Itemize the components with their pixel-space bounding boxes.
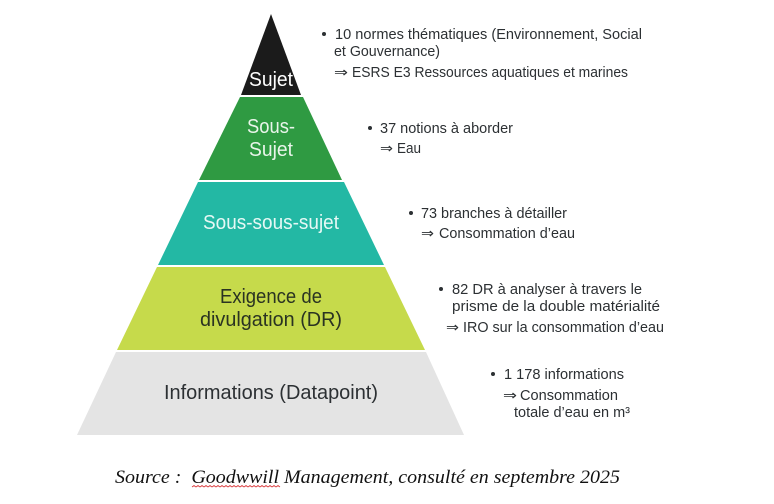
- text block: Sous-sous-sujet details: [409, 206, 575, 242]
- tier: Exigence de divulgation: divulgation (DR): [200, 309, 342, 331]
- text block: DR details: IRO sur la consommation d’eau: [463, 320, 664, 336]
- tier: Sous-Sujet: [199, 97, 342, 180]
- text block: Informations details: Consommation: [520, 388, 618, 404]
- tier: Informations: [77, 352, 464, 435]
- text block: Sujet details: [322, 27, 642, 81]
- text block: Sous-Sujet details: Eau: [397, 141, 421, 157]
- tier: Exigence de divulgation: [117, 267, 425, 350]
- text block: Sujet details: ESRS E3 Ressources aquatiques et marines: [352, 65, 628, 81]
- text block: DR details: prisme de la double matérialité: [452, 299, 660, 315]
- tier: Sous-Sujet: Sujet: [249, 139, 293, 161]
- text block: Sujet details: et Gouvernance): [334, 44, 440, 60]
- pyramid: [77, 14, 464, 435]
- tier: Sujet: [241, 14, 301, 95]
- text block: Informations details: totale d’eau en m³: [514, 405, 630, 421]
- text block: Sous-sous-sujet details: 73 branches à détailler: [421, 206, 567, 222]
- text block: DR details: [439, 282, 664, 336]
- text block: Informations details: [491, 367, 630, 421]
- tier: Sous-sous-sujet: Sous-sous-sujet: [203, 212, 339, 234]
- tier: Sous-sous-sujet: [158, 182, 384, 265]
- text block: Sujet details: 10 normes thématiques (Environnement, Social: [335, 27, 642, 43]
- text block: Sujet details: ⇒: [334, 65, 348, 81]
- text block: Sous-sous-sujet details: Consommation d’eau: [439, 226, 575, 242]
- tier: Sujet: Sujet: [249, 69, 293, 91]
- tier: Exigence de divulgation: Exigence de: [220, 286, 322, 308]
- source caption: Source : Goodwwill Management, consulté en septembre 2025: [115, 467, 620, 488]
- text block: DR details: 82 DR à analyser à travers le: [452, 282, 642, 298]
- text block: Informations details: 1 178 informations: [504, 367, 624, 383]
- text block: Sous-sous-sujet details: ⇒: [421, 226, 434, 242]
- text block: Informations details: ⇒: [503, 388, 517, 404]
- tier: Informations: Informations (Datapoint): [164, 382, 378, 404]
- tier: Sous-Sujet: Sous-: [247, 116, 295, 138]
- text block: Sous-Sujet details: [368, 121, 513, 157]
- text block: DR details: ⇒: [446, 320, 459, 336]
- text block: Sous-Sujet details: ⇒: [380, 141, 393, 157]
- text block: Sous-Sujet details: 37 notions à aborder: [380, 121, 513, 137]
